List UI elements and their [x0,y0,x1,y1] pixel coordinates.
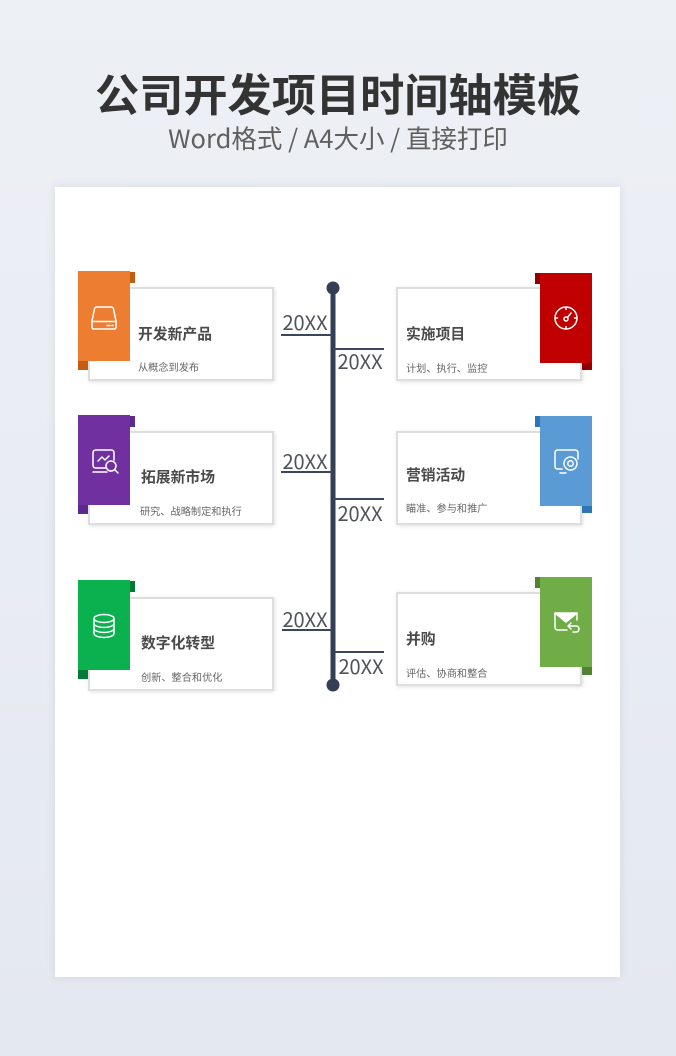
orange ribbon [78,271,130,361]
panel: 开发新产品 [78,271,276,383]
date connector right 1 [333,348,384,350]
ribbon top tab [535,416,540,427]
ribbon bottom tab [582,506,592,513]
timeline axis [326,282,340,692]
icon: gauge [554,306,578,330]
green ribbon [78,580,130,670]
card body [396,431,582,525]
date connector left 1 [281,334,333,336]
purple ribbon [78,415,130,505]
card body [88,287,274,381]
panel: 实施项目 [396,273,592,383]
heading: 实施项目 [406,327,465,343]
panel: 营销活动 [396,416,592,527]
description: 计划、执行、监控 [406,364,488,375]
date label right 2: 20XX [337,498,383,527]
ribbon top tab [130,272,135,283]
card body [88,597,274,691]
ribbon bottom tab [78,670,88,679]
date label left 2: 20XX [282,446,328,475]
card body [88,431,274,525]
date connector left 2 [281,471,333,473]
heading: 拓展新市场 [141,470,215,486]
date label left 3: 20XX [282,604,328,633]
title: 公司开发项目时间轴模板 [95,72,581,121]
description: 瞄准、参与和推广 [406,504,488,515]
ribbon top tab [130,416,135,427]
ribbon top tab [535,273,540,284]
date label right 3: 20XX [338,651,384,680]
description: 从概念到发布 [138,363,199,374]
description: 评估、协商和整合 [406,669,488,680]
blue ribbon [540,416,592,506]
icon: mail reply [554,612,580,633]
icon: database [93,614,115,638]
card body [396,287,582,381]
icon: hard drive [91,306,117,330]
date label left 1: 20XX [282,307,328,336]
panel: 数字化转型 [78,580,276,693]
ribbon bottom tab [78,361,88,370]
icon: chart with magnifier [92,449,119,474]
heading: 营销活动 [406,468,465,484]
subtitle: Word格式 / A4大小 / 直接打印 [168,119,508,156]
icon: screen with gear [554,449,579,474]
card body [396,592,582,686]
light green ribbon [540,577,592,667]
heading: 开发新产品 [138,327,212,343]
ribbon top tab [130,581,135,592]
white sheet [55,187,620,977]
ribbon bottom tab [78,505,88,514]
date label right 1: 20XX [337,346,383,375]
date connector left 3 [282,629,333,631]
description: 研究、战略制定和执行 [140,507,242,518]
description: 创新、整合和优化 [141,673,222,684]
ribbon top tab [535,577,540,588]
heading: 并购 [406,632,436,648]
panel: 拓展新市场 [78,415,276,527]
ribbon bottom tab [582,667,592,675]
date connector right 3 [333,651,384,653]
red ribbon [540,273,592,363]
date connector right 2 [333,498,384,500]
heading: 数字化转型 [141,636,215,652]
ribbon bottom tab [582,363,592,370]
panel: 并购 [396,577,592,688]
